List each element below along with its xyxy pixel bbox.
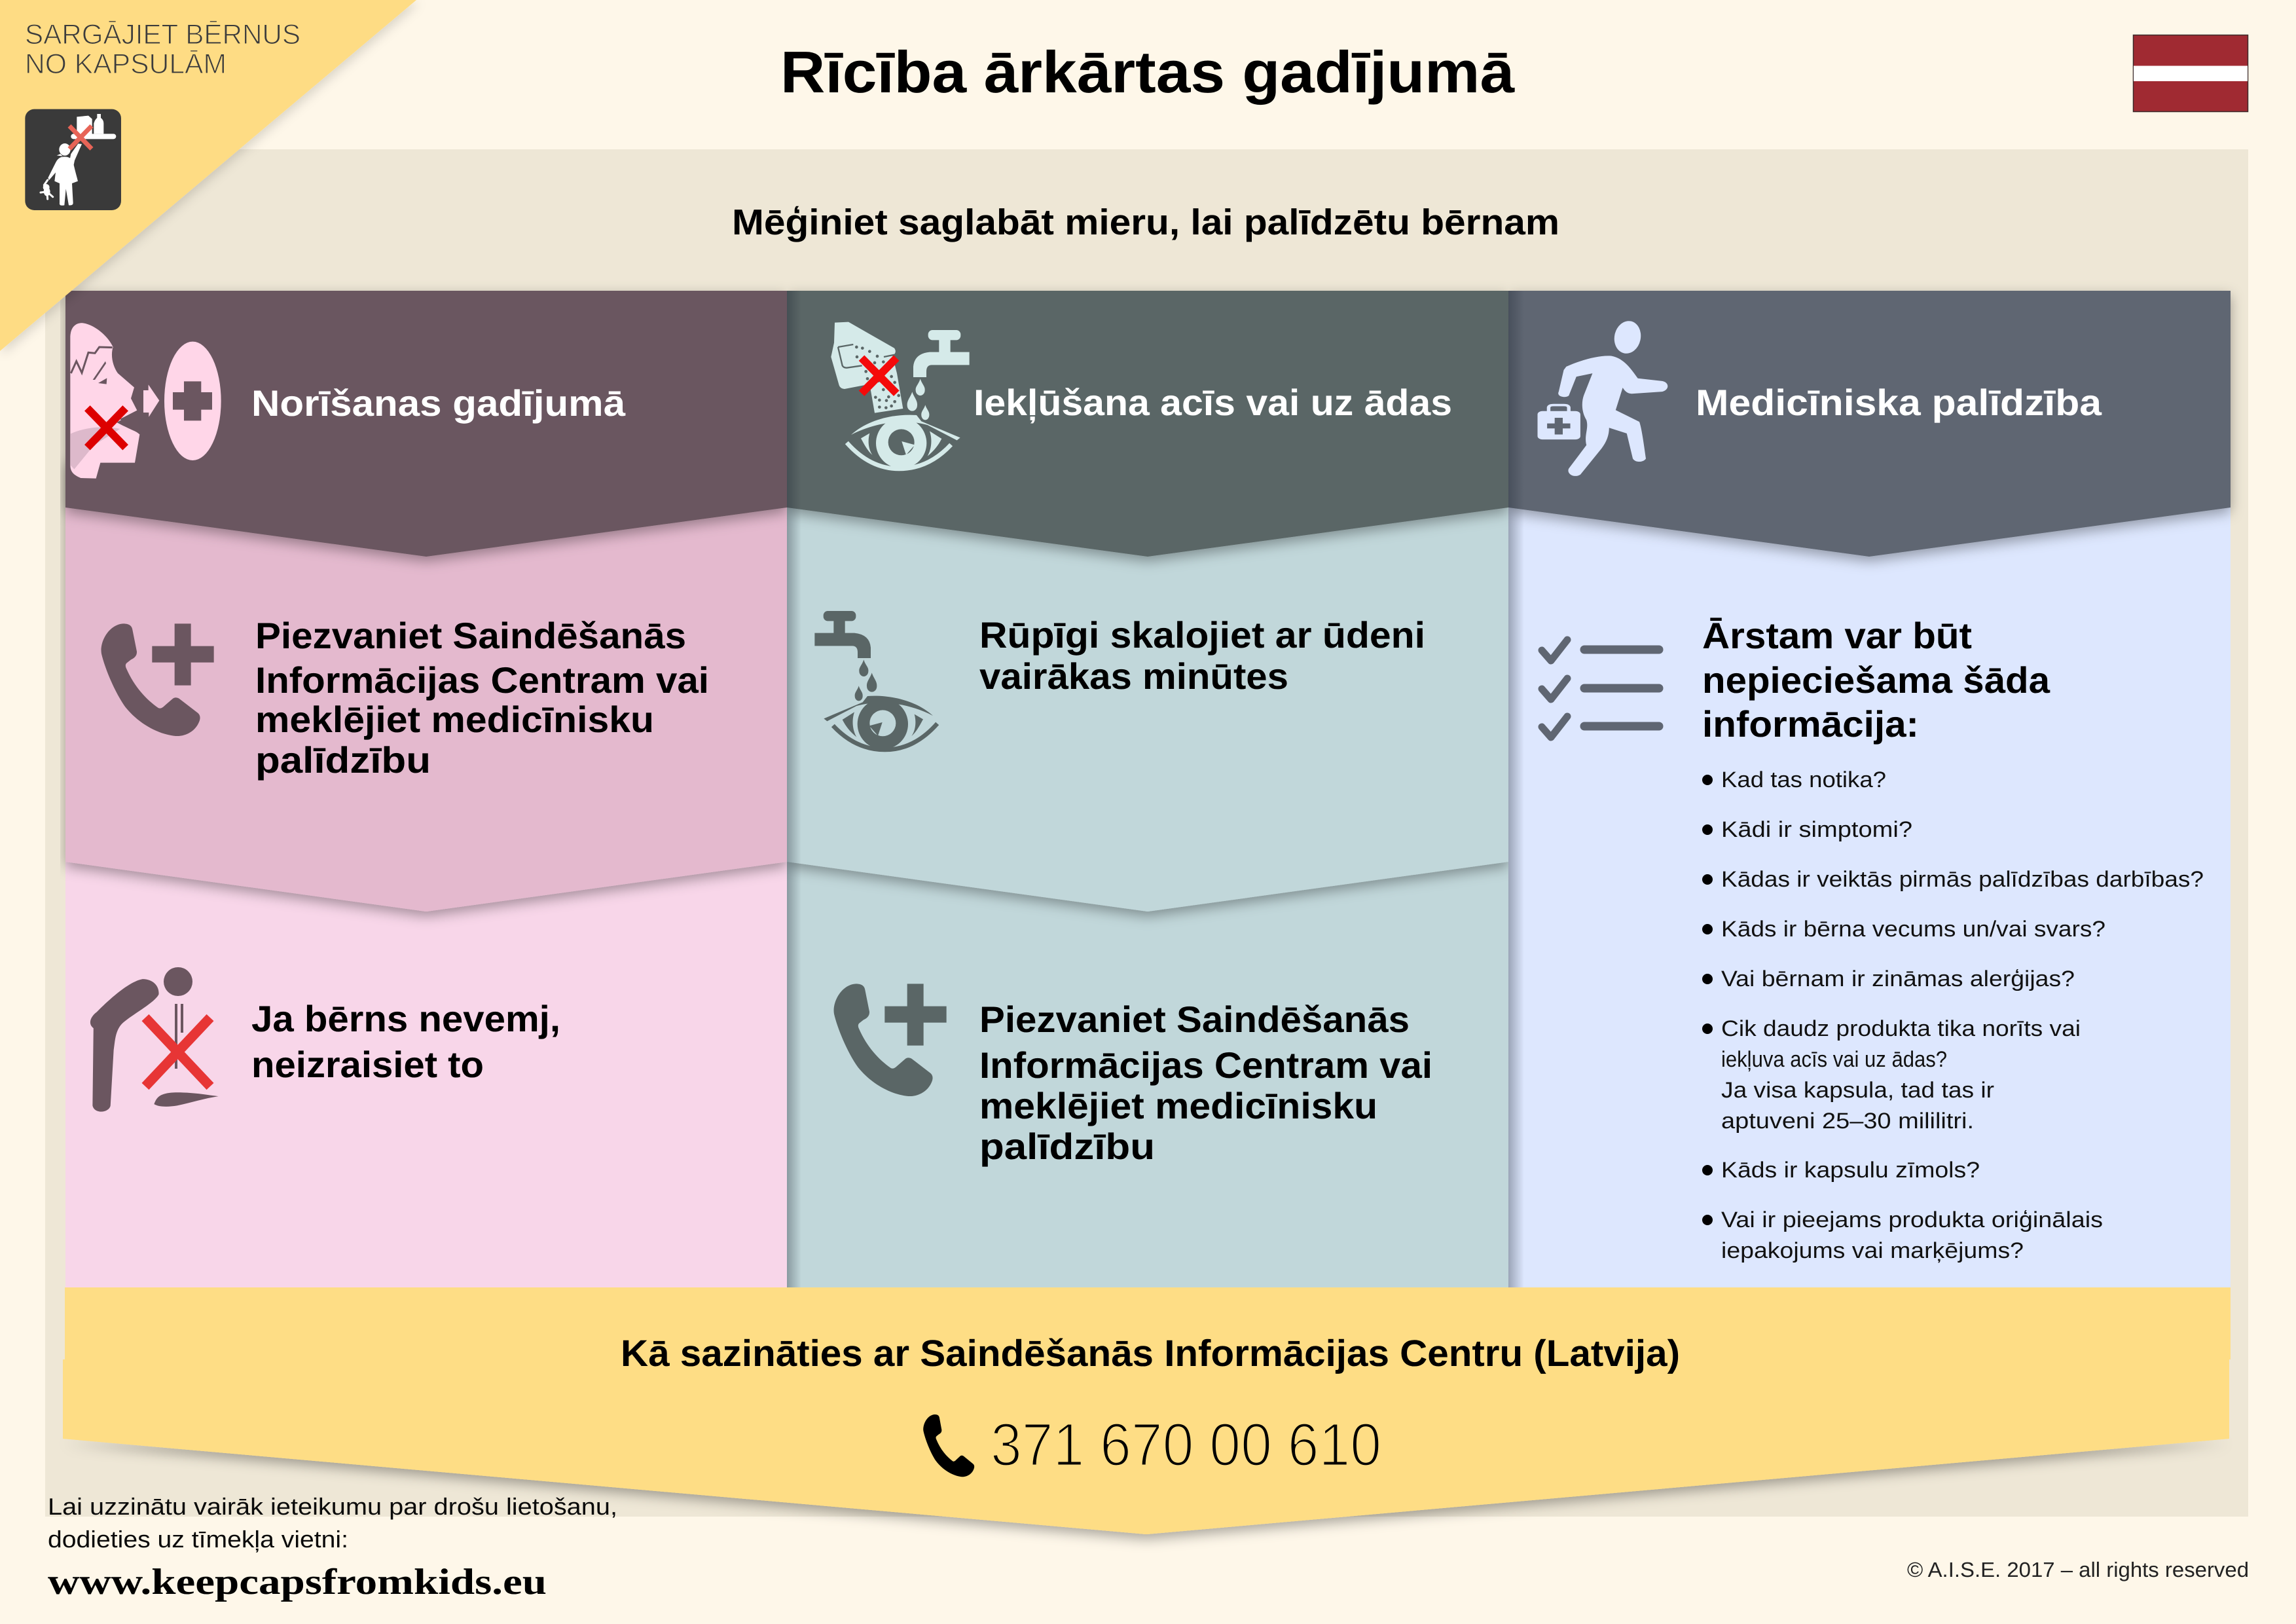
rinse instruction text: Rūpīgi skalojiet ar ūdeni <box>979 614 1425 655</box>
doctor information heading: informācija: <box>1702 703 1919 745</box>
icon: tap rinsing eye <box>814 611 938 750</box>
column heading: Iekļūšana acīs vai uz ādas <box>974 382 1452 424</box>
question list: aptuveni 25–30 mililitri. <box>1721 1109 1974 1134</box>
question list: Kad tas notika? <box>1721 767 1886 792</box>
call instruction text: Informācijas Centram vai <box>255 659 709 701</box>
icon: phone <box>923 1414 974 1477</box>
question list <box>1702 767 2204 1263</box>
band lower shadow <box>63 1439 2229 1534</box>
campaign text: SARGĀJIET BĒRNUS <box>25 19 301 50</box>
rinse instruction text <box>979 614 1425 697</box>
lower background <box>787 786 1508 1287</box>
middle chevron <box>65 458 787 912</box>
question list: Vai bērnam ir zināmas alerģijas? <box>1721 967 2075 991</box>
footer note: dodieties uz tīmekļa vietni: <box>48 1526 348 1553</box>
warning text <box>251 998 560 1085</box>
call instruction text <box>979 999 1432 1167</box>
panel: ingestion column <box>65 291 787 1287</box>
question list: Vai ir pieejams produkta oriģinālais <box>1721 1208 2103 1232</box>
call instruction text: Informācijas Centram vai <box>979 1044 1432 1086</box>
footer note: Lai uzzinātu vairāk ieteikumu par drošu lietošanu, <box>48 1493 617 1520</box>
copyright: © A.I.S.E. 2017 – all rights reserved <box>1907 1558 2249 1581</box>
doctor information heading <box>1702 615 2050 745</box>
campaign text <box>25 19 301 80</box>
subtitle: Mēģiniet saglabāt mieru, lai palīdzētu bērnam <box>732 202 1559 242</box>
icon: running person with first aid kit <box>1537 318 1667 476</box>
panel: eye and skin contact column <box>787 291 1508 1287</box>
band shape <box>63 1287 2231 1534</box>
warning text: Ja bērns nevemj, <box>251 998 560 1039</box>
question list: Cik daudz produkta tika norīts vai <box>1721 1016 2081 1041</box>
website link: www.keepcapsfromkids.eu <box>48 1562 547 1602</box>
icon: do not induce vomiting <box>90 967 219 1112</box>
column background <box>1508 458 2231 1287</box>
footer note <box>48 1493 617 1553</box>
contact heading: Kā sazināties ar Saindēšanās Informācijas Centru (Latvija) <box>621 1333 1680 1375</box>
icon: child reaching for shelf <box>25 109 121 210</box>
phone number: 371 670 00 610 <box>991 1411 1381 1479</box>
question list: Kāds ir bērna vecums un/vai svars? <box>1721 917 2105 942</box>
question list: Kāds ir kapsulu zīmols? <box>1721 1158 1980 1183</box>
title: Rīcība ārkārtas gadījumā <box>780 40 1515 105</box>
warning text: neizraisiet to <box>251 1044 484 1085</box>
header chevron <box>65 291 787 557</box>
panel: contact band <box>63 1287 2231 1534</box>
call instruction text <box>255 615 709 781</box>
question list: Ja visa kapsula, tad tas ir <box>1721 1078 1994 1103</box>
panel: medical help column <box>1508 291 2231 1287</box>
corner banner <box>0 0 416 351</box>
call instruction text: Piezvaniet Saindēšanās <box>979 999 1410 1040</box>
call instruction text: palīdzību <box>979 1126 1155 1167</box>
rinse instruction text: vairākas minūtes <box>979 655 1288 697</box>
icon: Latvian flag <box>2133 35 2248 111</box>
campaign text: NO KAPSULĀM <box>25 48 227 80</box>
icon: mouth and poison cross <box>70 323 221 479</box>
column heading: Norīšanas gadījumā <box>251 382 626 424</box>
icon: phone with plus <box>834 984 947 1096</box>
column side shadow <box>1508 291 1524 1287</box>
question list: iekļuva acīs vai uz ādas? <box>1721 1047 1947 1072</box>
call instruction text: meklējiet medicīnisku <box>979 1085 1377 1126</box>
call instruction text: meklējiet medicīnisku <box>255 699 654 740</box>
icon: phone with plus <box>101 623 214 736</box>
column side shadow <box>787 291 801 1287</box>
column heading: Medicīniska palīdzība <box>1696 382 2102 423</box>
doctor information heading: Ārstam var būt <box>1702 615 1972 656</box>
header chevron <box>787 291 1508 557</box>
icon: checklist <box>1542 640 1659 737</box>
doctor information heading: nepieciešama šāda <box>1702 659 2050 701</box>
middle chevron <box>787 458 1508 912</box>
yellow triangle <box>0 0 416 351</box>
call instruction text: palīdzību <box>255 739 431 781</box>
lower background <box>65 786 787 1287</box>
header chevron <box>1508 291 2231 557</box>
call instruction text: Piezvaniet Saindēšanās <box>255 615 686 656</box>
question list: Kādas ir veiktās pirmās palīdzības darbības? <box>1721 867 2204 892</box>
question list: Kādi ir simptomi? <box>1721 817 1912 842</box>
icon: capsule, tap and eye <box>831 322 970 469</box>
question list: iepakojums vai marķējums? <box>1721 1238 2024 1263</box>
